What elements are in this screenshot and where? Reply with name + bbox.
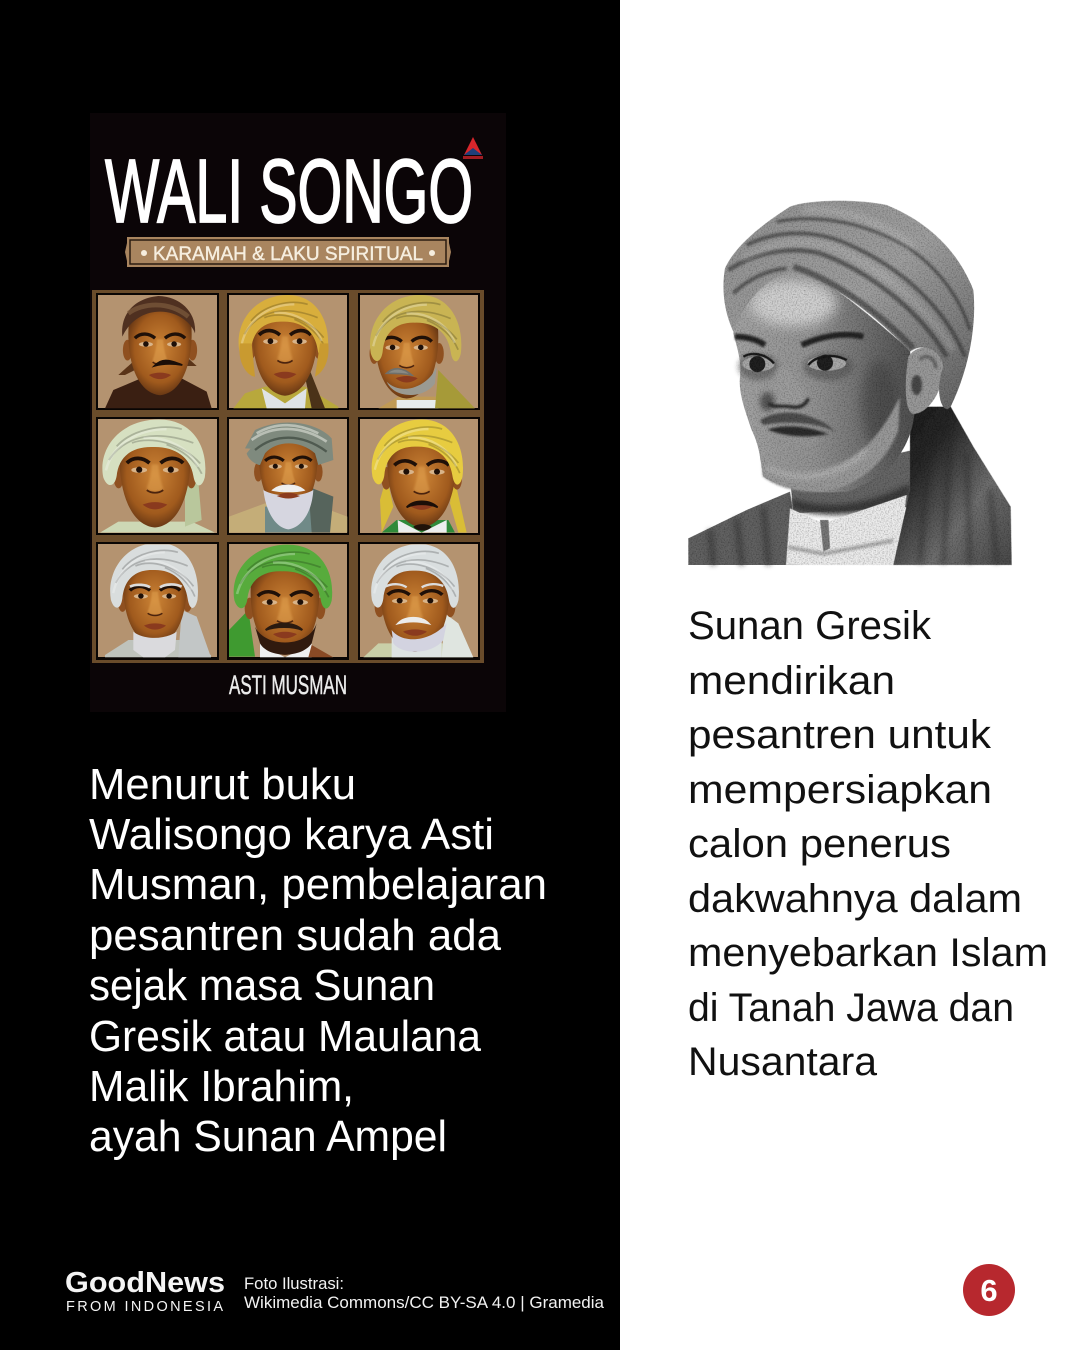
collar (786, 495, 907, 565)
photo credit (244, 1274, 605, 1312)
portrait rows 2 and 3 (100, 419, 473, 657)
ear (906, 348, 944, 414)
text block: right paragraph: menyebarkan Islam (688, 931, 1048, 975)
book title: WALI SONGO (105, 142, 473, 242)
text block: right paragraph: dakwahnya dalam (688, 877, 1022, 921)
text block: right paragraph: Sunan Gresik (688, 604, 932, 648)
photo credit: Wikimedia Commons/CC BY-SA 4.0 | Gramedia (244, 1293, 605, 1312)
subtitle banner (125, 237, 451, 267)
text block: left paragraph: ayah Sunan Ampel (89, 1112, 447, 1161)
logo: GoodNews from Indonesia: GoodNews (65, 1267, 225, 1299)
face 8: green turban, dark beard (229, 545, 333, 657)
illustration: Sunan Gresik portrait (688, 201, 1012, 565)
subtitle banner: KARAMAH & LAKU SPIRITUAL (153, 244, 423, 265)
text block: left paragraph: Musman, pembelajaran (89, 860, 547, 909)
text block: left paragraph: sejak masa Sunan (89, 961, 435, 1010)
beard (762, 397, 900, 492)
portrait row 1 (105, 295, 475, 408)
face 7: white turban, white beard (105, 543, 211, 657)
lips (767, 426, 828, 436)
text block: right paragraph: mendirikan (688, 659, 895, 703)
face 9: white turban, white beard, orange face (363, 544, 473, 657)
text block: left paragraph: pesantren sudah ada (89, 911, 502, 960)
neck (790, 450, 913, 513)
mustache (760, 413, 835, 432)
face (733, 270, 915, 492)
text block: left paragraph: Menurut buku (89, 760, 356, 809)
page number badge (963, 1264, 1015, 1316)
eyes (742, 357, 774, 371)
text block: right paragraph: di Tanah Jawa dan (688, 986, 1014, 1030)
text block: left paragraph: Malik Ibrahim, (89, 1062, 354, 1111)
face 1: batik cap (105, 296, 212, 408)
logo: GoodNews from Indonesia (65, 1267, 225, 1315)
nose (772, 367, 808, 408)
panel: black left column (0, 0, 620, 1350)
text block: right paragraph (688, 604, 1048, 1084)
face 4: pale green turban (100, 420, 215, 533)
logo: GoodNews from Indonesia: FROM INDONESIA (66, 1299, 223, 1315)
photo credit: Foto Ilustrasi: (244, 1274, 344, 1293)
text block: left paragraph: Gresik atau Maulana (89, 1012, 482, 1061)
coat (688, 492, 800, 565)
page number badge: 6 (980, 1273, 998, 1308)
book author: ASTI MUSMAN (229, 670, 347, 700)
turban (723, 201, 974, 409)
head cloth tail (893, 407, 1012, 565)
text block: right paragraph: pesantren untuk (688, 713, 992, 757)
portrait grid frame (92, 290, 484, 663)
face 6: yellow turban, goatee (372, 419, 467, 533)
text block: right paragraph: Nusantara (688, 1040, 878, 1084)
text block: left paragraph (89, 760, 547, 1161)
face 3: olive turban, gray beard (370, 295, 475, 408)
text block: right paragraph: calon penerus (688, 822, 951, 866)
face 2: yellow turban (233, 295, 338, 408)
brows (735, 335, 863, 345)
publisher logo (463, 137, 483, 159)
text block: left paragraph: Walisongo karya Asti (89, 810, 494, 859)
text block: right paragraph: mempersiapkan (688, 768, 992, 812)
face 5: gray turban, white beard (229, 423, 347, 533)
book cover: Wali Songo (90, 113, 506, 712)
